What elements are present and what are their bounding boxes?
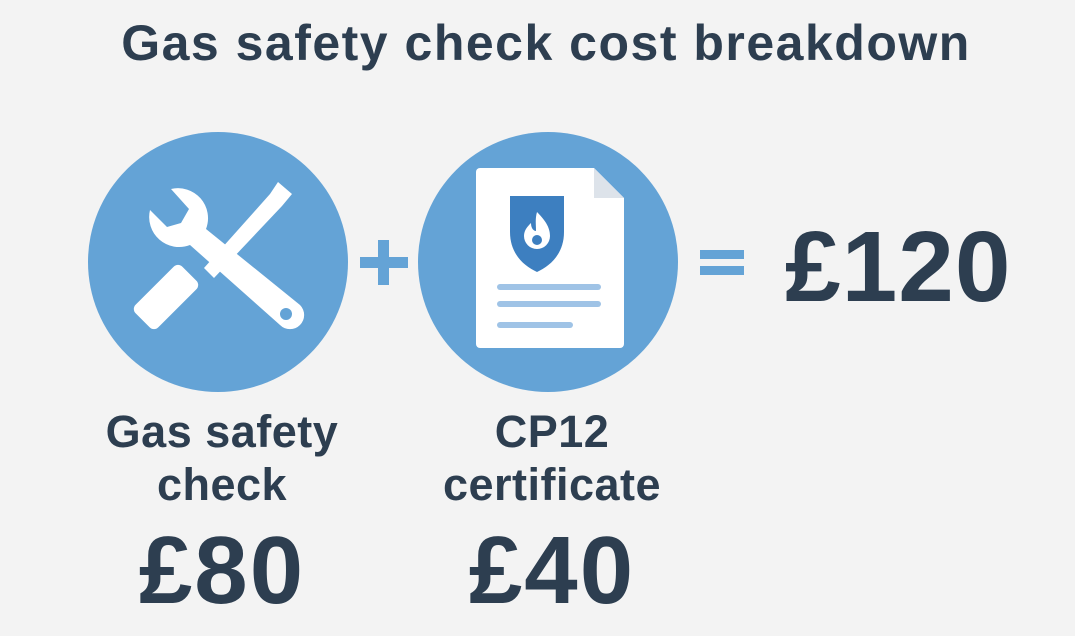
label: CP12 certificate: CP12 — [495, 406, 609, 457]
label: gas safety check: check — [157, 459, 287, 510]
equals — [700, 250, 744, 275]
plus — [360, 240, 408, 285]
price: £40: £40 — [469, 517, 635, 624]
price: £80: £80 — [139, 517, 305, 624]
label: gas safety check: Gas safety — [106, 406, 338, 457]
icon: tools circle — [88, 132, 348, 392]
icon: certificate circle — [418, 132, 678, 392]
label: CP12 certificate: certificate — [443, 459, 661, 510]
label: gas safety check — [106, 406, 338, 510]
title: Gas safety check cost breakdown — [121, 15, 971, 71]
total: £120 — [785, 211, 1011, 323]
label: CP12 certificate — [443, 406, 661, 510]
